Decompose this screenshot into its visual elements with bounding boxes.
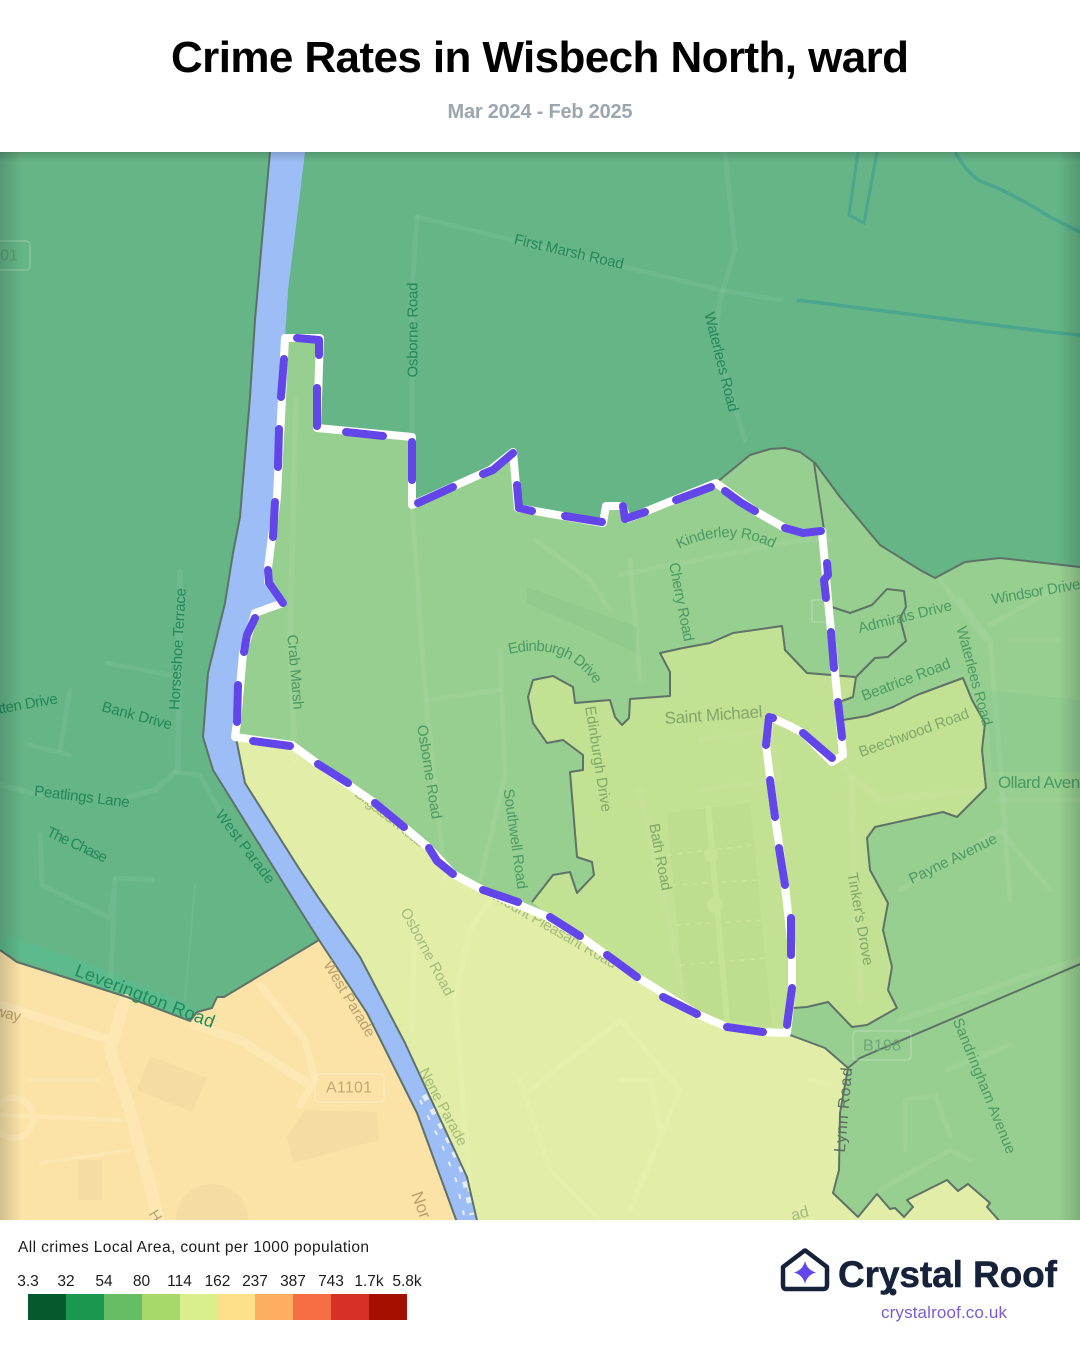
- legend colour scale: [28, 1294, 407, 1320]
- lightest area streets: [466, 1180, 470, 1192]
- orange area streets: [0, 985, 315, 1225]
- street labels: Edinburgh Drive: [508, 640, 600, 683]
- street labels: Leverington Road: [72, 960, 218, 1032]
- legend value labels: 32: [57, 1273, 75, 1290]
- street labels: Peatlings Lane: [33, 783, 131, 811]
- street labels: Osborne Road: [397, 905, 457, 999]
- street labels: Sandringham Avenue: [949, 1016, 1019, 1156]
- street labels: Waterlees Road: [953, 625, 995, 727]
- legend value labels: 387: [280, 1273, 306, 1290]
- legend: [17, 1239, 422, 1320]
- area: orange west: [0, 940, 458, 1225]
- street labels: Brigstock Road: [351, 785, 429, 851]
- patch: darker field north ward: [527, 587, 637, 653]
- street labels: Southwell Road: [500, 788, 530, 890]
- wordmark: Crystal Roof: [838, 1254, 1058, 1295]
- street labels: Beechwood Road: [857, 705, 971, 761]
- street labels: Nene Parade: [415, 1065, 471, 1149]
- street labels: Mount Pleasant Road: [490, 888, 620, 972]
- street labels: Osborne Road: [413, 724, 445, 820]
- legend value labels: 162: [205, 1273, 230, 1290]
- street labels: 01: [0, 248, 18, 264]
- area: lightest yellow-green south: [236, 738, 1003, 1225]
- street labels: Bank Drive: [100, 698, 174, 734]
- wordmark y dot: [890, 1288, 896, 1296]
- ward boundary white line: [235, 338, 843, 1033]
- website url: crystalroof.co.uk: [881, 1303, 1008, 1322]
- legend value labels: 54: [95, 1273, 113, 1290]
- ward boundary purple dashes: [237, 338, 842, 1032]
- street labels: Beatrice Road: [859, 655, 953, 705]
- Crystal Roof logo: [783, 1250, 1058, 1322]
- road network: [10, 157, 1008, 1000]
- street labels: Kinderley Road: [676, 526, 777, 548]
- road band: Leverington Road: [0, 942, 190, 1015]
- street labels: Horseshoe Terrace: [166, 588, 190, 710]
- legend value labels: 237: [242, 1273, 268, 1290]
- street labels: ad: [789, 1203, 811, 1225]
- street labels: Waterlees Road: [700, 310, 742, 414]
- street labels: A1101: [326, 1080, 372, 1096]
- street labels: First Marsh Road: [513, 231, 625, 273]
- street labels: Windsor Drive: [990, 576, 1080, 608]
- road shields: [0, 241, 911, 1102]
- area: dark green outer: [0, 152, 1080, 1020]
- legend value labels: 1.7k: [354, 1273, 384, 1290]
- cemetery plot: [667, 845, 764, 966]
- region boundaries: [0, 152, 1080, 1225]
- street labels: Crab Marsh: [283, 634, 307, 710]
- street labels: Nor: [407, 1189, 435, 1221]
- street labels: Lynn Road: [832, 1067, 856, 1153]
- area: light green central: [528, 626, 986, 1035]
- patch: darker field east: [986, 690, 1080, 772]
- area: mid green ward: [235, 338, 1080, 1220]
- street labels: Tinker's Drove: [843, 871, 877, 967]
- street labels: H: [145, 1207, 165, 1225]
- street labels: Saint Michael: [664, 702, 763, 728]
- street labels: West Parade: [320, 958, 378, 1040]
- legend value labels: 743: [318, 1273, 344, 1290]
- street labels: Payne Avenue: [906, 830, 1000, 888]
- street labels: West Parade: [212, 807, 278, 887]
- date range subtitle: Mar 2024 - Feb 2025: [448, 101, 632, 123]
- river white markings: [420, 1095, 472, 1215]
- street labels: [0, 234, 1080, 1265]
- legend value labels: 5.8k: [392, 1273, 422, 1290]
- canals north-east: [797, 152, 1080, 335]
- river Nene: [203, 152, 478, 1225]
- legend value labels: 3.3: [17, 1273, 39, 1290]
- legend title: All crimes Local Area, count per 1000 population: [18, 1239, 369, 1256]
- street labels: B198: [863, 1038, 901, 1054]
- map edge vignette: [0, 152, 1080, 1220]
- legend value labels: 80: [133, 1273, 150, 1290]
- title: Crime Rates in Wisbech North, ward: [171, 33, 909, 82]
- street labels: The Chase: [44, 824, 110, 866]
- legend value labels: 114: [167, 1273, 192, 1290]
- street labels: Admirals Drive: [856, 597, 954, 637]
- orange area buildings: [78, 1056, 379, 1256]
- legend value labels: [17, 1273, 422, 1290]
- street labels: Osborne Road: [404, 282, 422, 378]
- street labels: Bath Road: [645, 822, 675, 892]
- street labels: Cherry Road: [665, 561, 697, 643]
- icon: house with sparkle: [783, 1250, 827, 1289]
- street labels: Edinburgh Drive: [581, 705, 615, 813]
